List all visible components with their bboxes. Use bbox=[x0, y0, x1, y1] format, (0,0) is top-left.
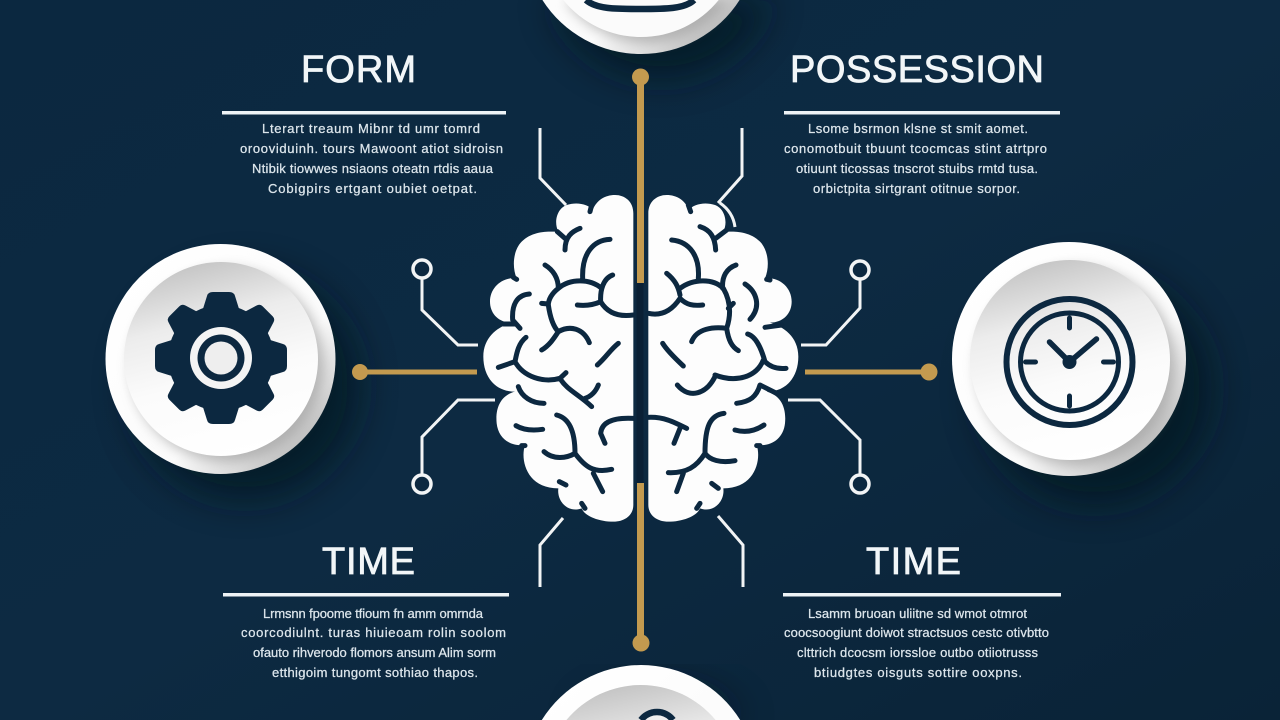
text block: possession: otiuunt ticossas tnscrot stuibs rmtd tusa. bbox=[796, 161, 1038, 176]
text block: possession bbox=[784, 121, 1047, 196]
text block: time left: etthigoim tungomt sothiao thapos. bbox=[272, 665, 478, 680]
icon: bottom partial bbox=[641, 712, 673, 720]
horizontal connector left bbox=[352, 364, 477, 380]
icon disc: top bbox=[542, 0, 772, 79]
text block: time right: Lsamm bruoan uliitne sd wmot otmrot bbox=[808, 606, 1027, 621]
text block: possession: Lsome bsrmon klsne st smit aomet. bbox=[808, 121, 1028, 136]
circuit lines bbox=[413, 128, 869, 587]
icon disc: gear bbox=[106, 244, 360, 500]
heading: possession: POSSESSION bbox=[790, 49, 1044, 91]
text block: time right: btiudgtes oisguts sottire ooxpns. bbox=[814, 665, 1022, 680]
text block: time left bbox=[241, 606, 506, 680]
text block: time left: Lrmsnn fpoome tfioum fn amm omrnda bbox=[263, 606, 484, 621]
left hemisphere bbox=[483, 195, 633, 522]
panel: time left bbox=[223, 541, 509, 680]
brain bbox=[483, 195, 798, 522]
panel: time right bbox=[783, 541, 1061, 680]
text block: possession: conomotbuit tbuunt tcocmcas stint atrtpro bbox=[784, 141, 1047, 156]
text block: time right bbox=[784, 606, 1049, 680]
icon: top partial bbox=[586, 0, 694, 9]
icon disc: bottom bbox=[542, 665, 746, 720]
central vertical connector bbox=[632, 68, 650, 652]
text block: time right: coocsoogiunt doiwot stractsuos cestc otivbtto bbox=[784, 625, 1049, 640]
heading: time right: TIME bbox=[866, 541, 961, 583]
text block: time right: clttrich dcocsm iorssloe outbo otiiotrusss bbox=[797, 645, 1038, 660]
text block: form: Ntibik tiowwes nsiaons oteatn rtdis aaua bbox=[252, 161, 494, 176]
right hemisphere bbox=[648, 195, 798, 522]
text block: form: Cobigpirs ertgant oubiet oetpat. bbox=[268, 181, 477, 196]
panel: form bbox=[222, 49, 506, 196]
text block: possession: orbictpita sirtgrant otitnue sorpor. bbox=[813, 181, 1020, 196]
horizontal connector right bbox=[805, 364, 938, 380]
panel: possession bbox=[784, 49, 1060, 196]
text block: form: Lterart treaum Mibnr td umr tomrd bbox=[262, 121, 480, 136]
text block: form: orooviduinh. tours Mawoont atiot sidroisn bbox=[240, 141, 503, 156]
text block: time left: coorcodiulnt. turas hiuieoam rolin soolom bbox=[241, 625, 506, 640]
heading: time left: TIME bbox=[322, 541, 415, 583]
icon: gear bbox=[155, 292, 287, 424]
heading: form: FORM bbox=[301, 49, 416, 91]
icon disc: clock bbox=[952, 242, 1212, 505]
icon: clock bbox=[1006, 299, 1132, 425]
text block: form bbox=[240, 121, 503, 196]
text block: time left: ofauto rihverodo flomors ansum Alim sorm bbox=[253, 645, 496, 660]
